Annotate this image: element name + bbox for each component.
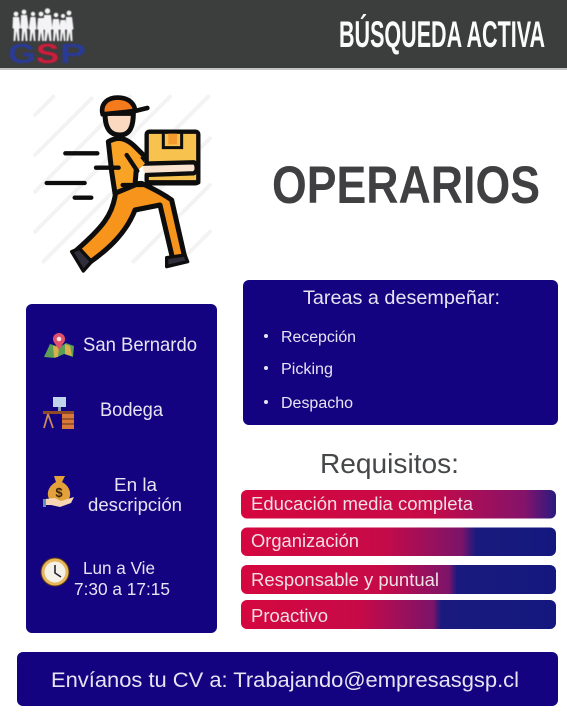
- requirement: organization: Organización: [251, 530, 359, 551]
- schedule text: [74, 558, 170, 599]
- workplace text: Bodega: [100, 399, 163, 421]
- background stripes: [35, 97, 210, 262]
- schedule text: 7:30 a 17:15: [74, 579, 170, 599]
- icon: silhouettes of people: [12, 8, 74, 41]
- task list: Despacho: [281, 395, 353, 412]
- logo: GSP: [8, 8, 86, 69]
- salary text: descripción: [88, 494, 182, 515]
- icon: desk: [43, 397, 74, 429]
- panel: tasks: [243, 280, 558, 425]
- heading: requisitos: Requisitos:: [320, 448, 459, 479]
- speed lines: [47, 153, 119, 198]
- task list: [264, 329, 356, 412]
- cap: [102, 98, 135, 114]
- belt: [123, 182, 198, 185]
- header band: [0, 0, 567, 70]
- requirement: responsible: [241, 565, 556, 594]
- torso: [108, 139, 145, 193]
- requirements list: [241, 490, 556, 629]
- location text: San Bernardo: [83, 334, 197, 356]
- panel: job details: [26, 304, 217, 633]
- icon: money bag in hand: $: [55, 485, 63, 500]
- logo letters: S: [36, 38, 59, 69]
- shoes: [72, 248, 92, 271]
- icon: money bag in hand: [43, 476, 74, 507]
- icon: map with pin: [44, 333, 74, 358]
- requirement: proactive: [241, 600, 556, 629]
- task list: Picking: [281, 361, 333, 378]
- salary text: [88, 474, 182, 515]
- requirement: proactive: Proactivo: [251, 605, 328, 626]
- requirement: responsible: Responsable y puntual: [251, 569, 439, 590]
- call to action bar: [17, 652, 558, 706]
- logo letters: P: [60, 38, 86, 69]
- logo letters: G: [8, 38, 36, 69]
- task list: Recepción: [281, 329, 356, 346]
- illustration: delivery worker running with box: [35, 97, 210, 271]
- box: [147, 132, 198, 183]
- icon: clock: [41, 558, 69, 586]
- logo letters: [8, 38, 86, 69]
- legs: [77, 183, 185, 263]
- requirement: education: Educación media completa: [251, 493, 474, 514]
- requirement: organization: [241, 528, 556, 556]
- arm: [142, 162, 197, 175]
- call to action bar: Envíanos tu CV a: Trabajando@empresasgsp.cl: [51, 668, 519, 692]
- requirement: education: [241, 490, 556, 518]
- salary text: En la: [114, 474, 158, 495]
- head: [105, 113, 133, 135]
- schedule text: Lun a Vie: [83, 558, 155, 578]
- tasks heading: Tareas a desempeñar:: [303, 287, 500, 309]
